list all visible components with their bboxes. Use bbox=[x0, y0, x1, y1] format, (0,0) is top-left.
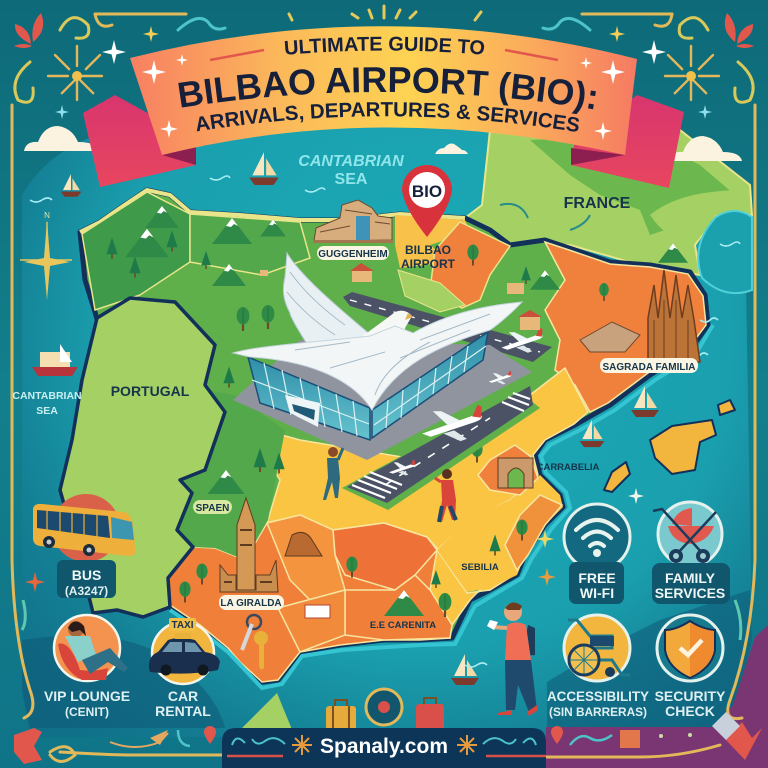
map labels: SEA bbox=[335, 171, 368, 188]
compass bbox=[20, 211, 72, 300]
dove body bbox=[350, 311, 412, 372]
region: southern orange Andalusia bbox=[168, 515, 452, 682]
map labels: FRANCE bbox=[564, 195, 631, 212]
icon: free Wi-Fi bbox=[564, 504, 630, 570]
title: ULTIMATE GUIDE TO bbox=[284, 36, 484, 54]
label: free Wi-Fi: WI-FI bbox=[580, 585, 614, 601]
La Giralda landmark bbox=[220, 498, 278, 592]
region: Navarra orange bbox=[430, 222, 510, 308]
clouds bbox=[24, 126, 742, 161]
BIO location pin bbox=[402, 165, 452, 237]
map labels: SPAEN bbox=[196, 503, 229, 514]
map labels: SEA bbox=[36, 405, 58, 417]
sea: left boats and waves bbox=[30, 152, 740, 685]
map labels: SAGRADA FAMILIA bbox=[603, 362, 695, 373]
label: accessibility: (SIN BARRERAS) bbox=[549, 705, 647, 719]
map labels: CANTABRIAN bbox=[298, 153, 404, 170]
banner accents bbox=[142, 50, 625, 140]
icon: car rental bbox=[149, 618, 220, 684]
airport terminal bbox=[233, 253, 522, 440]
right ribbon tail bbox=[571, 95, 684, 188]
map labels: BILBAO bbox=[405, 243, 451, 257]
label: VIP lounge bbox=[44, 688, 130, 719]
title: BILBAO AIRPORT (BIO): bbox=[178, 67, 596, 114]
map labels: CANTABRIAN bbox=[12, 390, 82, 402]
map: France bbox=[465, 130, 752, 293]
map: Spain mainland bbox=[80, 190, 708, 682]
banner bbox=[83, 26, 684, 188]
map: Portugal bbox=[60, 298, 225, 617]
banner body bbox=[130, 26, 637, 155]
white building bbox=[305, 605, 330, 618]
small Guggenheim building near coast bbox=[580, 322, 640, 352]
roof feather lines bbox=[295, 314, 490, 395]
region: central yellow bbox=[245, 368, 588, 625]
dove beak bbox=[405, 313, 413, 320]
label: car rental: RENTAL bbox=[155, 703, 211, 719]
arch monument bbox=[498, 458, 533, 488]
traveller with backpack bbox=[487, 602, 538, 716]
label: car rental bbox=[155, 688, 211, 719]
label: free Wi-Fi: FREE bbox=[578, 570, 616, 586]
label: family services bbox=[652, 563, 730, 604]
footer band bbox=[222, 728, 546, 768]
label: family services: FAMILY bbox=[665, 570, 716, 586]
icon: security shield bbox=[657, 615, 723, 681]
car keys icon bbox=[242, 615, 268, 670]
label: family services: SERVICES bbox=[655, 585, 725, 601]
label: free Wi-Fi bbox=[569, 562, 624, 604]
entrance bbox=[285, 395, 320, 427]
map labels: LA GIRALDA bbox=[220, 598, 282, 609]
compass: N bbox=[44, 211, 50, 220]
corner ornaments bbox=[14, 6, 754, 119]
map: Morocco tip bbox=[240, 693, 293, 732]
icon: bus bbox=[33, 494, 135, 562]
ribbon folds bbox=[162, 147, 625, 165]
front runway bbox=[342, 371, 540, 510]
region: central green west bbox=[177, 390, 285, 560]
person walking bbox=[435, 469, 456, 522]
icon: VIP lounge bbox=[54, 615, 128, 681]
inner sea area bbox=[22, 122, 752, 737]
label: VIP lounge: VIP LOUNGE bbox=[44, 688, 130, 704]
label: bus: BUS bbox=[72, 567, 101, 583]
map labels: CARRABELIA bbox=[537, 462, 600, 473]
region: dark green Asturias bbox=[82, 192, 190, 310]
Guggenheim landmark bbox=[313, 200, 393, 243]
label: VIP lounge: (CENIT) bbox=[65, 705, 109, 719]
rear runway bbox=[343, 292, 552, 362]
apron bbox=[233, 340, 532, 460]
region: Basque yellow bbox=[395, 215, 470, 268]
icon: family services stroller bbox=[653, 502, 722, 566]
small houses bbox=[260, 263, 542, 330]
islands: Balearics bbox=[604, 400, 735, 492]
label: security check: CHECK bbox=[665, 703, 715, 719]
label: security check: SECURITY bbox=[655, 688, 726, 704]
icon: car rental: TAXI bbox=[171, 620, 194, 631]
map labels: SEBILIA bbox=[461, 562, 499, 573]
person with camera bbox=[323, 447, 343, 500]
map of Iberia bbox=[60, 130, 752, 732]
footer decorations bbox=[14, 712, 762, 764]
Sagrada Familia landmark bbox=[648, 270, 700, 362]
map labels: GUGGENHEIM bbox=[318, 249, 388, 260]
label: accessibility: ACCESSIBILITY bbox=[547, 688, 650, 704]
region: light green Cantabria bbox=[398, 270, 465, 312]
rock monument bbox=[285, 532, 322, 556]
title: ARRIVALS, DEPARTURES & SERVICES bbox=[196, 102, 580, 132]
label: bus bbox=[57, 560, 116, 598]
BIO location pin: BIO bbox=[412, 182, 442, 201]
map labels: PORTUGAL bbox=[111, 383, 190, 399]
title bbox=[178, 36, 596, 132]
map labels: AIRPORT bbox=[401, 257, 456, 271]
region: arch orange Valencia bbox=[478, 445, 538, 495]
darker lower sea panels bbox=[22, 590, 752, 728]
roof and right wing bbox=[233, 302, 522, 410]
purple corner bbox=[546, 625, 768, 768]
map labels bbox=[12, 153, 698, 631]
footer band: Spanaly.com bbox=[320, 735, 448, 758]
map decorations: mountains and trees bbox=[106, 206, 688, 617]
map: coast water edge bbox=[170, 325, 713, 688]
icon: accessibility wheelchair bbox=[564, 615, 630, 681]
glass facade left bbox=[248, 357, 370, 440]
region: Catalonia and Aragon orange bbox=[545, 242, 706, 412]
left wing of dove bbox=[283, 253, 372, 344]
label: accessibility bbox=[547, 688, 650, 719]
glass facade right bbox=[372, 332, 488, 438]
label: security check bbox=[655, 688, 726, 719]
compass medallion and suitcases bbox=[326, 689, 444, 734]
side sparkles bbox=[22, 488, 741, 640]
map labels: E.E CARENITA bbox=[370, 620, 436, 631]
left ribbon tail bbox=[83, 95, 196, 187]
label: bus: (A3247) bbox=[65, 584, 108, 598]
label: car rental: CAR bbox=[168, 688, 198, 704]
airport runways bbox=[233, 292, 552, 510]
